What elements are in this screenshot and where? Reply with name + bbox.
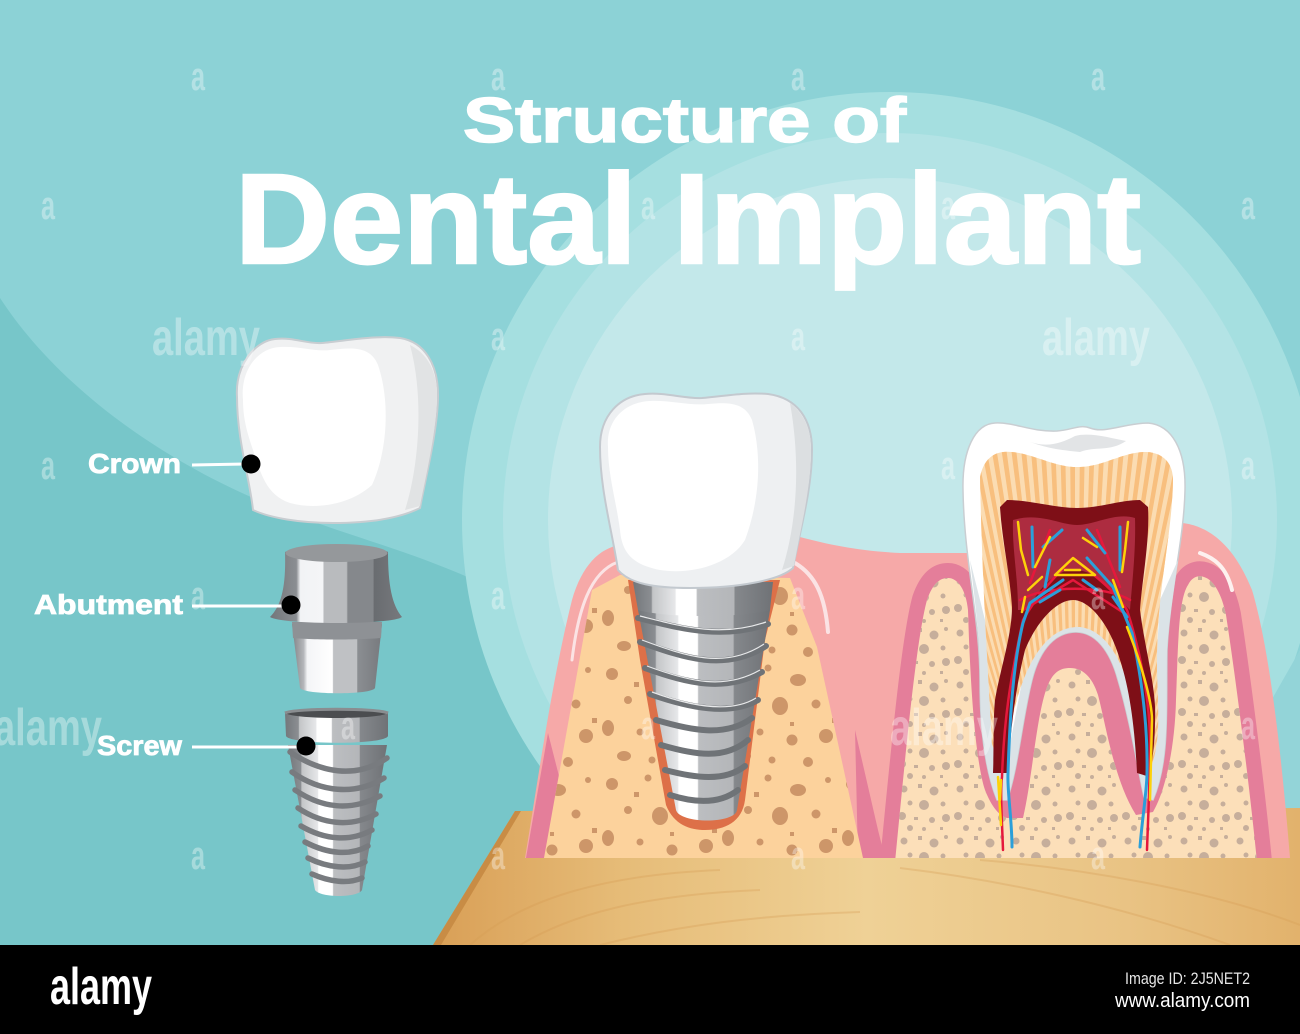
bone around root bbox=[895, 576, 1257, 862]
label: crown bbox=[88, 448, 260, 479]
watermark: a bbox=[791, 574, 805, 618]
watermark: alamy bbox=[890, 699, 998, 757]
wooden table bbox=[433, 808, 1300, 945]
watermark: a bbox=[1091, 834, 1105, 878]
watermark: a bbox=[41, 444, 55, 488]
natural tooth in jaw bbox=[882, 422, 1272, 858]
watermark: a bbox=[791, 315, 805, 359]
gum highlights bbox=[572, 562, 828, 660]
watermark bbox=[0, 55, 1255, 878]
watermark: a bbox=[1091, 55, 1105, 99]
root cementum bbox=[970, 560, 1178, 800]
socket bbox=[628, 580, 780, 830]
watermark: a bbox=[1241, 444, 1255, 488]
watermark: a bbox=[641, 704, 655, 748]
watermark: a bbox=[791, 834, 805, 878]
watermark: a bbox=[491, 55, 505, 99]
gum highlight bbox=[1200, 553, 1232, 590]
label: screw: Screw bbox=[97, 730, 182, 761]
footer logo: alamy bbox=[50, 958, 152, 1016]
title bbox=[235, 86, 1141, 291]
footer bar bbox=[0, 945, 1300, 1034]
implant in jaw bbox=[544, 393, 863, 858]
label: abutment bbox=[34, 589, 300, 620]
watermark: a bbox=[791, 55, 805, 99]
enamel and cementum bbox=[963, 423, 1185, 800]
watermark: a bbox=[491, 315, 505, 359]
watermark: a bbox=[1241, 704, 1255, 748]
implant crown bbox=[600, 393, 812, 588]
label: crown: Crown bbox=[88, 448, 181, 479]
label: abutment: Abutment bbox=[34, 589, 183, 620]
dentin with fanned tubules bbox=[980, 452, 1173, 764]
gums: pink tissue behind both teeth bbox=[525, 523, 1290, 858]
pulp chamber bbox=[993, 500, 1155, 777]
part: abutment bbox=[270, 544, 402, 693]
website: www.alamy.com bbox=[1114, 990, 1250, 1012]
watermark: a bbox=[641, 184, 655, 228]
exploded implant parts bbox=[237, 337, 438, 896]
bone around implant bbox=[544, 575, 863, 858]
watermark: a bbox=[941, 184, 955, 228]
title line 2: Dental Implant bbox=[235, 148, 1141, 291]
occlusal shadow bbox=[1028, 435, 1126, 452]
watermark: a bbox=[341, 704, 355, 748]
part: screw bbox=[285, 708, 388, 896]
watermark: a bbox=[491, 834, 505, 878]
watermark: a bbox=[941, 444, 955, 488]
watermark: a bbox=[1091, 574, 1105, 618]
watermark: alamy bbox=[152, 309, 260, 367]
watermark: a bbox=[191, 574, 205, 618]
part: crown bbox=[237, 337, 438, 523]
watermark: a bbox=[191, 55, 205, 99]
watermark: alamy bbox=[1042, 309, 1150, 367]
image id: Image ID: 2J5NET2 bbox=[1125, 969, 1250, 988]
watermark: a bbox=[1241, 184, 1255, 228]
implant screw bbox=[633, 582, 773, 820]
watermark: a bbox=[191, 834, 205, 878]
watermark: a bbox=[491, 574, 505, 618]
watermark: a bbox=[641, 444, 655, 488]
nerves and vessels bbox=[998, 522, 1152, 850]
label: screw bbox=[97, 730, 316, 761]
watermark: a bbox=[41, 184, 55, 228]
title line 1: Structure of bbox=[463, 86, 907, 156]
